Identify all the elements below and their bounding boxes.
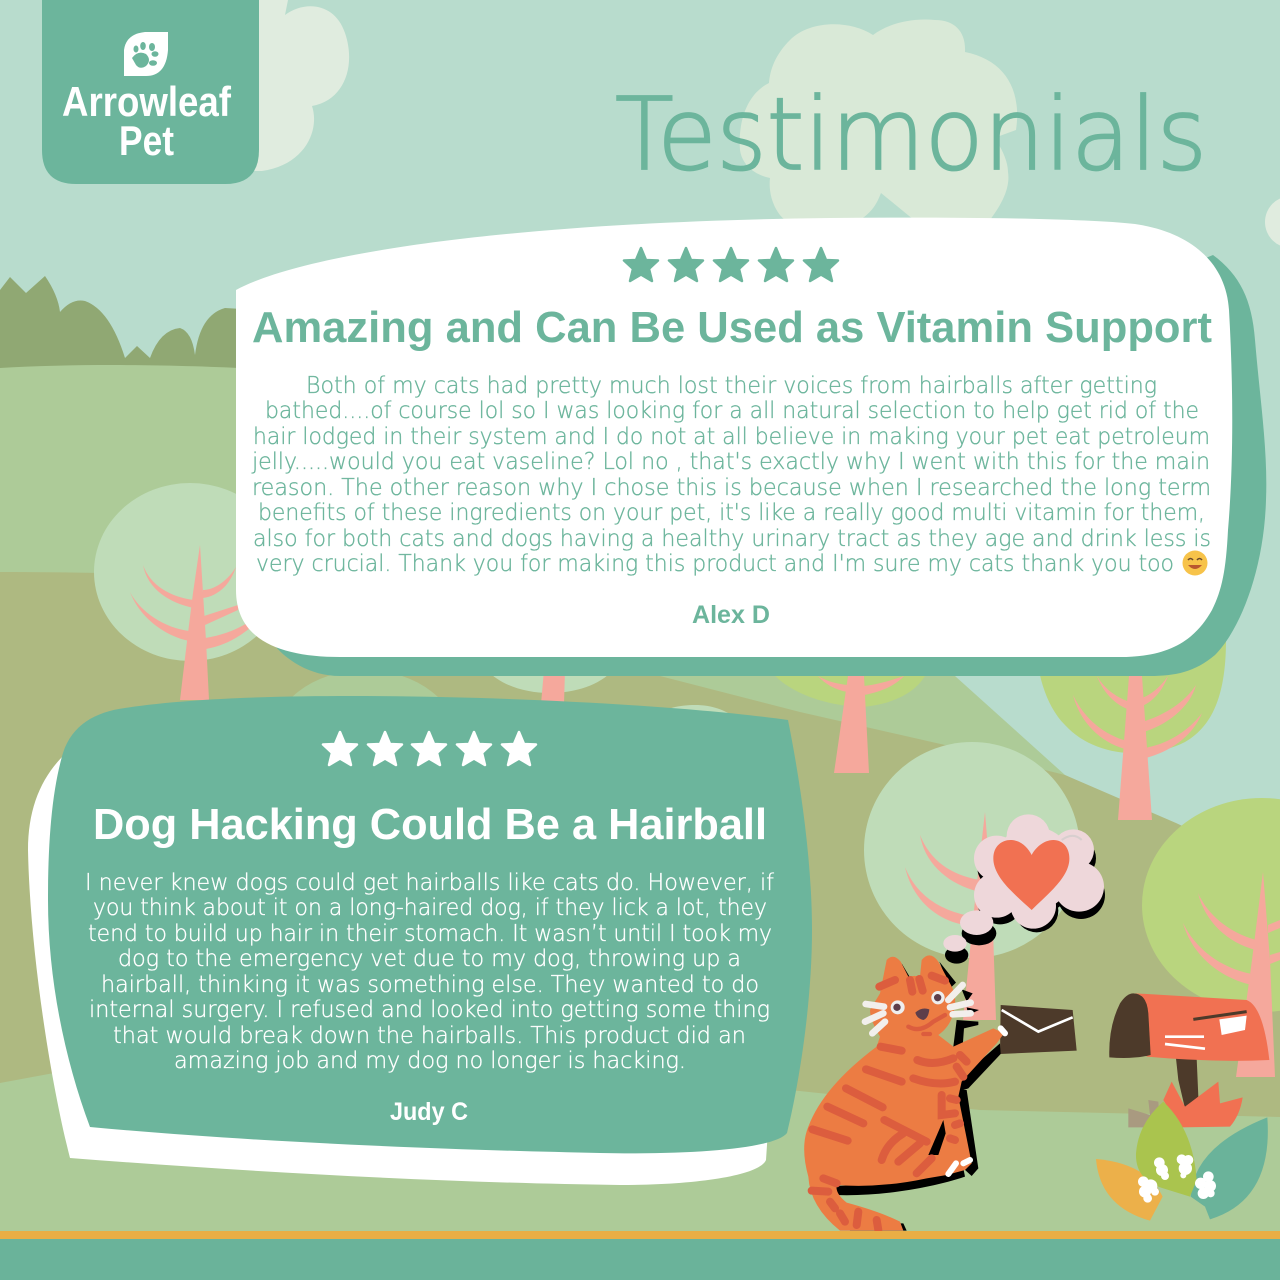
review two body: tend to build up hair in their stomach. It wasn’t until I took my <box>88 919 772 947</box>
review two body: you think about it on a long-haired dog, if they lick a lot, they <box>93 893 767 921</box>
tree: left <box>94 483 286 700</box>
logo text: Pet <box>119 117 174 164</box>
thought bubble <box>943 814 1105 964</box>
review two body <box>85 868 775 1074</box>
panel: review two <box>48 696 812 1153</box>
green hill <box>0 365 1065 775</box>
review two body: amazing job and my dog no longer is hacking. <box>174 1046 686 1074</box>
review one body: jelly.....would you eat vaseline? Lol no , that's exactly why I went with this for the main <box>251 447 1210 475</box>
review two body: hairball, thinking it was something else. They wanted to do <box>101 970 759 998</box>
leaves logo <box>1096 1102 1268 1221</box>
review one body <box>251 371 1211 577</box>
olive hill <box>0 572 1280 1130</box>
logo text: Arrowleaf <box>62 78 232 125</box>
review two body: I never knew dogs could get hairballs like cats do. However, if <box>85 868 775 896</box>
panel: review one <box>236 218 1232 657</box>
cat <box>804 955 1005 1231</box>
logo badge <box>42 0 259 184</box>
review one author: Alex D <box>692 601 770 629</box>
review two body: internal surgery. I refused and looked into getting some thing <box>89 995 770 1023</box>
review one body: reason. The other reason why I chose this is because when I researched the long term <box>252 473 1211 501</box>
tree: trunk center right <box>770 670 928 773</box>
tree: trunk right <box>1073 676 1202 820</box>
icon: smiling emoji <box>1182 550 1208 576</box>
cloud: top left <box>240 0 349 171</box>
review one body: Both of my cats had pretty much lost their voices from hairballs after getting <box>306 371 1157 399</box>
review one body: very crucial. Thank you for making this product and I'm sure my cats thank you too <box>256 549 1174 577</box>
bottom band <box>0 1231 1280 1280</box>
icon: leaf with paw <box>124 32 168 76</box>
review two body: dog to the emergency vet due to my dog, throwing up a <box>118 944 741 972</box>
cat stripes <box>812 976 967 1230</box>
star rating <box>323 732 536 765</box>
review one body: bathed....of course lol so I was looking for a all natural selection to help get rid of the <box>265 396 1199 424</box>
tree: large pale circle <box>864 742 1080 1020</box>
tree: lime right <box>1142 798 1280 1077</box>
icon: envelope <box>1000 1005 1077 1054</box>
mound behind cards <box>270 670 460 820</box>
cloud: right edge <box>1265 196 1280 248</box>
star rating <box>624 248 838 281</box>
tree: small hidden <box>655 705 736 718</box>
cloud: center <box>740 20 1017 220</box>
review one body: hair lodged in their system and I do not at all believe in making your pet eat petroleum <box>253 422 1210 450</box>
icon: heart <box>993 840 1069 910</box>
mailbox <box>1109 993 1269 1127</box>
cat face <box>891 1000 905 1014</box>
tree: lime far right behind card <box>1036 640 1226 753</box>
ground <box>0 1073 1280 1240</box>
review two body: that would break down the hairballs. This product did an <box>113 1021 746 1049</box>
review one heading: Amazing and Can Be Used as Vitamin Support <box>252 303 1212 352</box>
panel: review one shadow <box>270 255 1266 676</box>
distant bushes <box>0 276 260 380</box>
review two heading: Dog Hacking Could Be a Hairball <box>93 800 767 849</box>
review one body: also for both cats and dogs having a healthy urinary tract as they age and drink less is <box>253 524 1211 552</box>
title: Testimonials <box>615 76 1207 193</box>
cat paws <box>948 1028 1005 1174</box>
tree: small center <box>487 670 613 704</box>
panel: review two shadow <box>28 757 768 1185</box>
illustration: cat, thought bubble, mailbox and leaves <box>804 814 1269 1231</box>
review one body: benefits of these ingredients on your pet, it's like a really good multi vitamin for them, <box>258 498 1205 526</box>
logo text <box>62 78 232 164</box>
review two author: Judy C <box>390 1098 468 1126</box>
